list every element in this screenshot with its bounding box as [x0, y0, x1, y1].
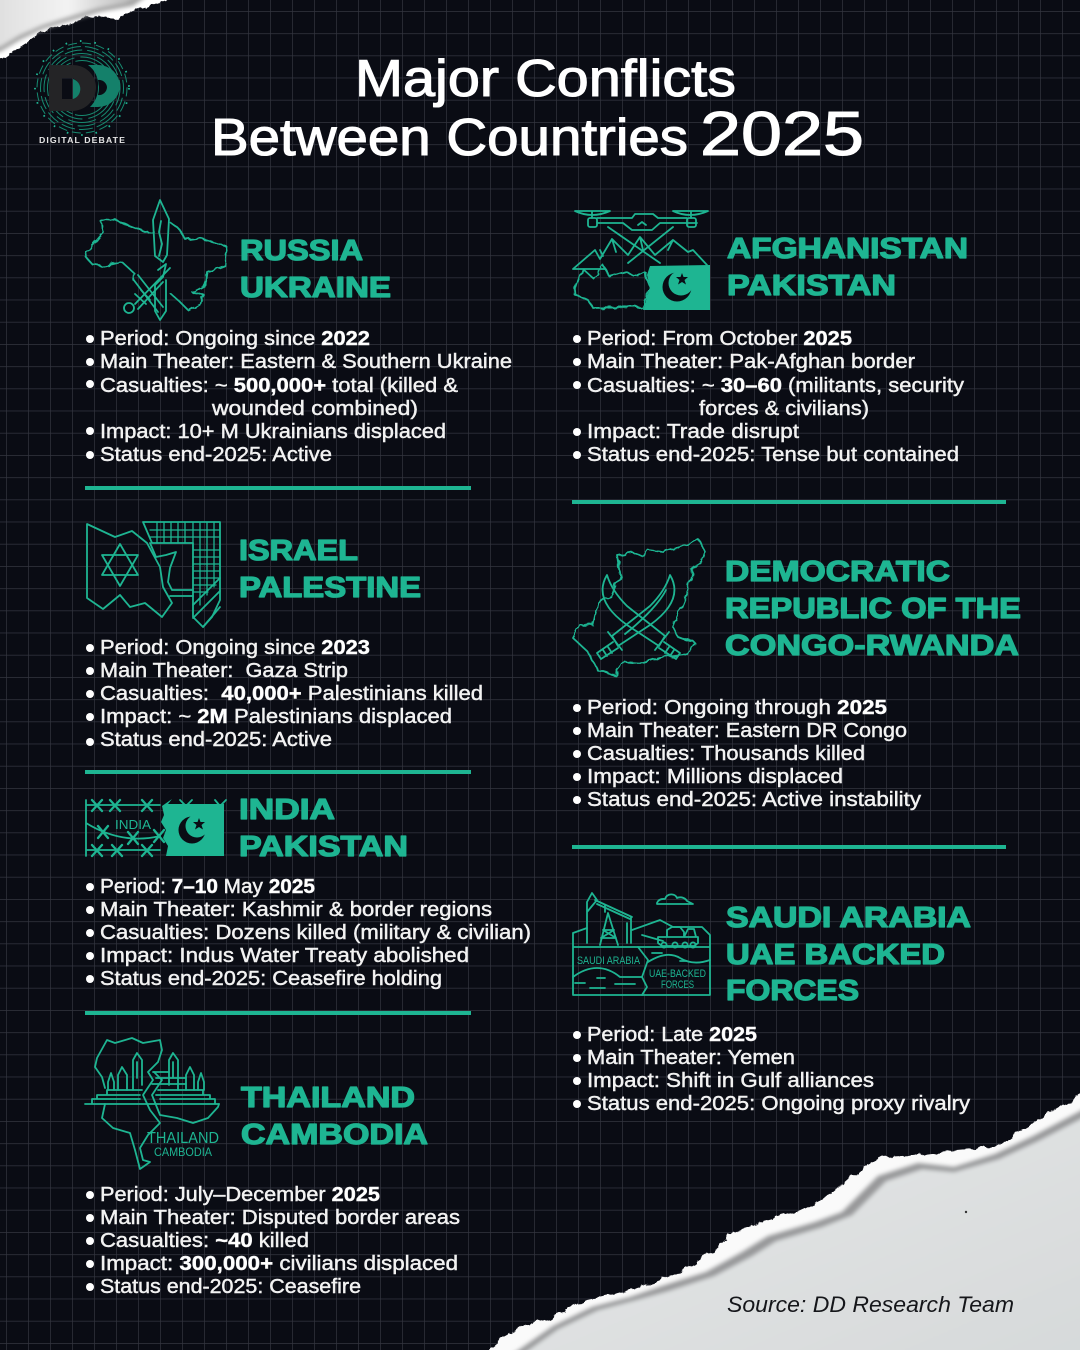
facts: Israel Palestine: Status end-2025: Active [100, 729, 332, 751]
torn paper: bottom right [478, 1092, 1080, 1350]
facts: Afghanistan Pakistan: Period: From October 2025 [587, 328, 852, 350]
facts: DR Congo Rwanda: Period: Ongoing through 2025 [587, 697, 887, 719]
icon: drone, mountains and Pakistan flag [573, 211, 710, 310]
icon: oil pump, tank and territory map [573, 893, 710, 995]
heading: Saudi Arabia UAE backed forces [726, 902, 971, 1007]
icon: barbed wire and Pakistan flag [86, 799, 226, 856]
icon: Israel Palestine map with star and grid [87, 522, 220, 627]
title: 2025 [700, 100, 864, 169]
icon: Thailand Cambodia map with temple [85, 1038, 219, 1169]
heading: Russia Ukraine: UKRAINE [240, 272, 391, 304]
facts: India Pakistan: Impact: Indus Water Treaty abolished [100, 945, 469, 967]
title [211, 50, 864, 169]
facts: Russia Ukraine: wounded combined) [211, 398, 418, 420]
facts: Thailand Cambodia: Period: July–December 2025 [100, 1184, 380, 1206]
heading: Afghanistan Pakistan: PAKISTAN [727, 270, 896, 302]
facts: Thailand Cambodia: Casualties: ~40 killed [100, 1230, 309, 1252]
icon: oil pump, tank and territory map: UAE-BACKED [649, 968, 706, 980]
facts: Israel Palestine: Period: Ongoing since 2023 [100, 637, 370, 659]
facts: Israel Palestine [86, 637, 483, 751]
heading: Thailand Cambodia: CAMBODIA [241, 1119, 428, 1151]
facts: Israel Palestine: Casualties: 40,000+ Palestinians killed [100, 683, 483, 705]
heading: Saudi Arabia UAE backed forces: SAUDI ARABIA [726, 902, 971, 934]
facts: DR Congo Rwanda: Status end-2025: Active instability [587, 789, 921, 811]
heading: Russia Ukraine [240, 235, 391, 304]
facts: DR Congo Rwanda: Casualties: Thousands killed [587, 743, 865, 765]
facts: Saudi Arabia UAE backed forces: Period: Late 2025 [587, 1024, 757, 1046]
heading: India Pakistan: INDIA [239, 794, 335, 826]
facts: Saudi Arabia UAE backed forces: Status end-2025: Ongoing proxy rivalry [587, 1093, 970, 1115]
heading: DR Congo Rwanda: CONGO-RWANDA [725, 630, 1019, 662]
heading: Israel Palestine: PALESTINE [239, 572, 421, 604]
panel: India Pakistan [86, 794, 531, 990]
facts: Saudi Arabia UAE backed forces [573, 1024, 970, 1115]
facts: Russia Ukraine [86, 328, 512, 466]
panel: Thailand Cambodia [85, 1038, 460, 1298]
panel: Afghanistan Pakistan [573, 211, 968, 466]
heading: DR Congo Rwanda: DEMOCRATIC [725, 556, 950, 588]
torn paper: top left [0, 0, 178, 62]
facts: India Pakistan: Main Theater: Kashmir & border regions [100, 899, 492, 921]
heading: Afghanistan Pakistan [727, 233, 968, 302]
icon: Thailand Cambodia map with temple: CAMBODIA [154, 1145, 212, 1159]
heading: Afghanistan Pakistan: AFGHANISTAN [727, 233, 968, 265]
facts: DR Congo Rwanda: Impact: Millions displaced [587, 766, 843, 788]
panel: Russia Ukraine [86, 200, 512, 466]
facts: India Pakistan: Period: 7–10 May 2025 [100, 876, 315, 898]
panel: DR Congo Rwanda [573, 541, 1021, 811]
title: Between Countries [211, 109, 688, 167]
facts: Russia Ukraine: Period: Ongoing since 2022 [100, 328, 370, 350]
facts: Saudi Arabia UAE backed forces: Main Theater: Yemen [587, 1047, 795, 1069]
facts: Afghanistan Pakistan: forces & civilians) [699, 398, 869, 420]
facts: Afghanistan Pakistan: Casualties: ~ 30–60 (militants, security [587, 375, 964, 397]
facts: Thailand Cambodia [86, 1184, 460, 1298]
facts: Thailand Cambodia: Main Theater: Disputed border areas [100, 1207, 460, 1229]
panel: Saudi Arabia UAE backed forces [573, 893, 971, 1115]
facts: Russia Ukraine: Main Theater: Eastern & Southern Ukraine [100, 351, 512, 373]
facts: India Pakistan: Status end-2025: Ceasefire holding [100, 968, 442, 990]
heading: DR Congo Rwanda: REPUBLIC OF THE [725, 593, 1021, 625]
facts: Afghanistan Pakistan [573, 328, 964, 466]
icon: oil pump, tank and territory map: FORCES [661, 979, 694, 991]
facts: Thailand Cambodia: Status end-2025: Ceasefire [100, 1276, 361, 1298]
heading: Thailand Cambodia: THAILAND [241, 1082, 415, 1114]
source note: Source: DD Research Team [727, 1292, 1014, 1317]
heading: Israel Palestine: ISRAEL [239, 535, 358, 567]
facts: Saudi Arabia UAE backed forces: Impact: Shift in Gulf alliances [587, 1070, 874, 1092]
logo: Digital Debate: DIGITAL DEBATE [39, 136, 126, 145]
heading: Saudi Arabia UAE backed forces: UAE BACKED [726, 939, 945, 971]
heading: Saudi Arabia UAE backed forces: FORCES [726, 975, 859, 1007]
heading: India Pakistan: PAKISTAN [239, 831, 408, 863]
icon: Thailand Cambodia map with temple: THAILAND [147, 1130, 219, 1147]
facts: Israel Palestine: Impact: ~ 2M Palestinians displaced [100, 706, 452, 728]
icon: barbed wire and Pakistan flag: INDIA [115, 817, 151, 832]
logo: Digital Debate [24, 30, 140, 146]
facts: India Pakistan: Casualties: Dozens killed (military & civilian) [100, 922, 531, 944]
icon: DR Congo map with crossed scimitars [573, 541, 705, 675]
heading: Thailand Cambodia [241, 1082, 428, 1151]
facts: India Pakistan [86, 876, 531, 990]
icon: Ukraine map with crossed swords [86, 200, 226, 320]
facts: Afghanistan Pakistan: Main Theater: Pak-Afghan border [587, 351, 915, 373]
facts: Afghanistan Pakistan: Impact: Trade disrupt [587, 421, 799, 443]
heading: Russia Ukraine: RUSSIA [240, 235, 363, 267]
icon: oil pump, tank and territory map: SAUDI ARABIA [577, 955, 641, 967]
facts: Israel Palestine: Main Theater: Gaza Strip [100, 660, 348, 682]
title: Major Conflicts [355, 50, 736, 108]
heading: Israel Palestine [239, 535, 421, 604]
facts: DR Congo Rwanda: Main Theater: Eastern DR Congo [587, 720, 907, 742]
facts: Thailand Cambodia: Impact: 300,000+ civilians displaced [100, 1253, 458, 1275]
facts: Russia Ukraine: Impact: 10+ M Ukrainians displaced [100, 421, 446, 443]
facts: Russia Ukraine: Status end-2025: Active [100, 444, 332, 466]
heading: DR Congo Rwanda [725, 556, 1021, 662]
facts: Russia Ukraine: Casualties: ~ 500,000+ total (killed & [100, 375, 459, 397]
facts: DR Congo Rwanda [573, 697, 921, 811]
facts: Afghanistan Pakistan: Status end-2025: Tense but contained [587, 444, 959, 466]
panel: Israel Palestine [86, 522, 483, 751]
heading: India Pakistan [239, 794, 408, 863]
